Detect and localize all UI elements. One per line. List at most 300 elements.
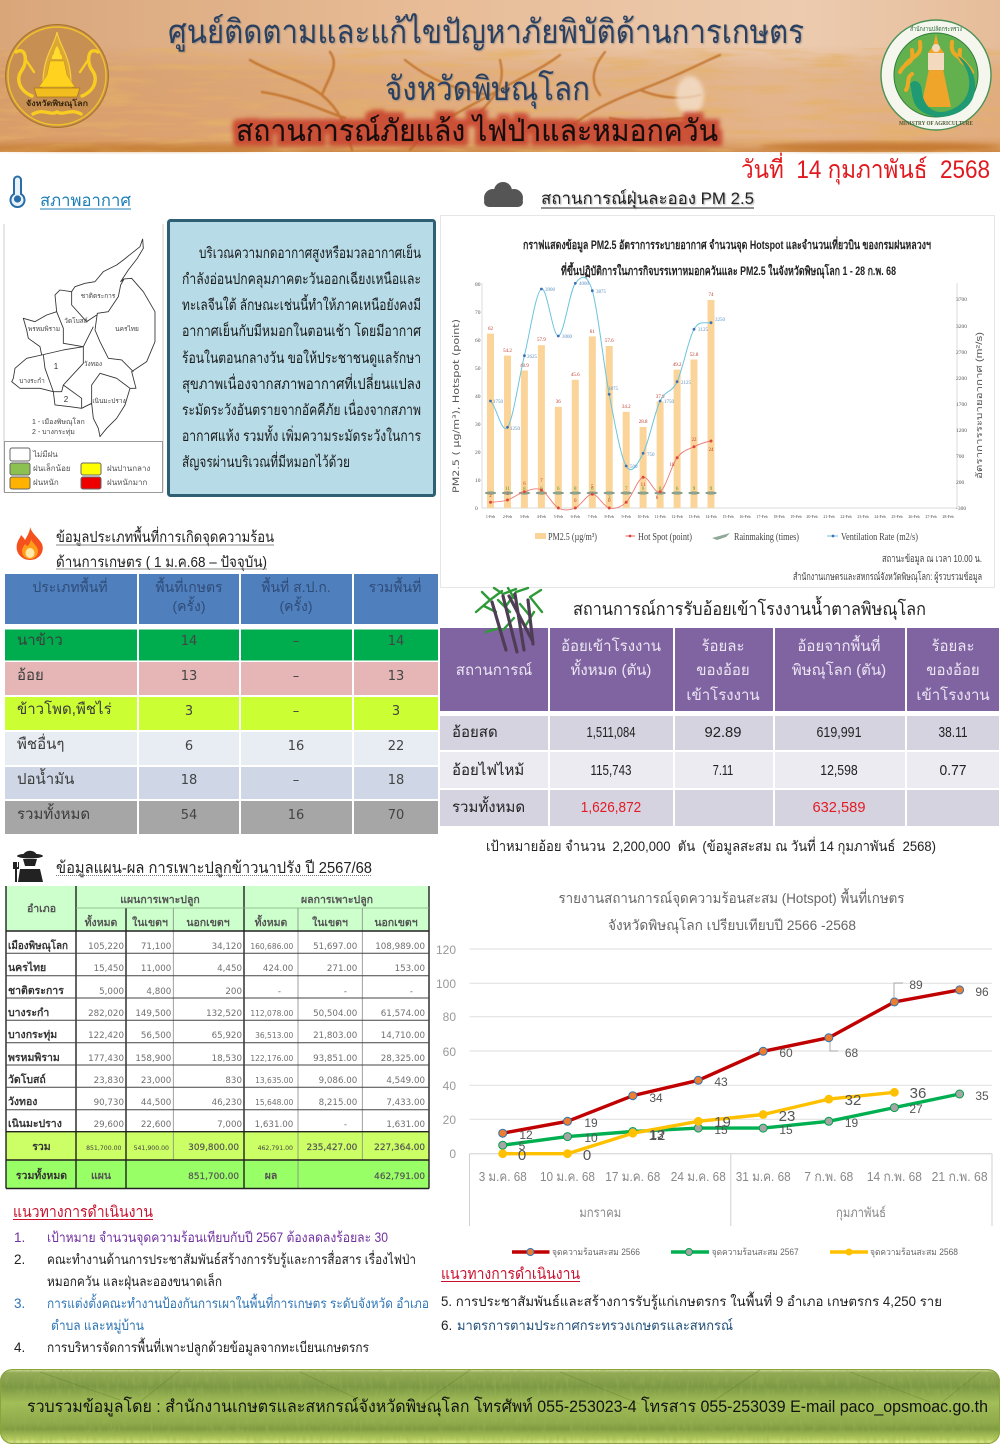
row: fresh cane: 1,511,084 (586, 724, 636, 741)
table headers: ในเขตฯ (312, 915, 348, 929)
rainmaking value labels: 8 (574, 487, 577, 492)
row: Wat Bot: 9,086.00 (319, 1076, 357, 1086)
row: Bang Krathum: 14,710.00 (381, 1031, 425, 1041)
row: Chat Trakan: 4,800 (146, 987, 171, 997)
PM2.5 value labels: 62 (488, 327, 494, 332)
data labels 2566 (519, 978, 989, 1142)
row: Phrom Phiram: 158,900 (135, 1054, 171, 1064)
title line 1: ศูนย์ติดตามและแก้ไขปัญหาภัยพิบัติด้านการเกษตร (168, 13, 804, 52)
ventilation markers and labels: 1875 (608, 387, 618, 392)
data labels 2568 (518, 1085, 926, 1164)
data labels 2568: 12 (649, 1127, 665, 1144)
row: Bang Rakam: บางระกำ (8, 1007, 49, 1019)
data labels 2567: 27 (909, 1102, 923, 1116)
weather map of Phitsanulok: วัดโบสถ์ (64, 317, 88, 325)
table header: พื้นที่เกษตร (155, 577, 223, 595)
table headers: ทั้งหมด (255, 914, 288, 929)
row: burnt cane: 12,598 (820, 762, 858, 779)
hot spot line (490, 441, 711, 510)
row: subtotal: รวม (32, 1141, 51, 1153)
heading: hotspot area types: ข้อมูลประเภทพื้นที่การเกิดจุดความร้อน (56, 526, 274, 547)
weather map of Phitsanulok: นครไทย (115, 325, 139, 333)
row: total: 16 (288, 808, 304, 823)
date axis labels: 6-Feb (571, 514, 580, 519)
header background: dry landscape (0, 0, 1000, 152)
item 2: หมอกควัน และฝุ่นละอองขนาดเล็ก (47, 1272, 222, 1290)
row: grand total: 851,700.00 (188, 1172, 239, 1182)
data status note (793, 553, 982, 583)
item 2: 2. (14, 1252, 25, 1267)
row: Mueang Phitsanulok: เมืองพิษณุโลก (8, 939, 68, 953)
table header: อ้อยเข้าโรงงาน (561, 637, 661, 655)
ventilation markers and labels: 3250 (715, 318, 726, 323)
rainmaking value labels: 11 (505, 487, 510, 492)
row: burnt cane: 115,743 (590, 762, 632, 779)
row: Bang Rakam: 61,574.00 (381, 1009, 425, 1019)
left axis labels: 40 (475, 394, 481, 400)
table: sugarcane (440, 628, 999, 826)
item 2: คณะทำงานด้านการประชาสัมพันธ์สร้างการรับรู้และการสื่อสาร เรื่องไฟป่า (47, 1250, 416, 1268)
row: Noen Maprang: 7,000 (217, 1120, 242, 1130)
table header: (ครั้ง) (172, 596, 206, 614)
chart legend: จุดความร้อนสะสม 2567 (712, 1247, 799, 1258)
hot spot markers and labels: 3 (506, 492, 509, 497)
rainmaking value labels: 6 (591, 487, 594, 492)
chart legend: จุดความร้อนสะสม 2566 (552, 1247, 640, 1258)
data labels 2566: 12 (519, 1128, 533, 1142)
date axis labels: 12-Feb (671, 514, 683, 519)
left axis labels: 70 (475, 310, 481, 316)
date axis labels: 5-Feb (554, 514, 563, 519)
hot spot markers and labels: 18 (670, 463, 675, 468)
item 4: 4. (14, 1340, 25, 1355)
date axis labels (486, 514, 954, 519)
row: Wat Bot: 13,635.00 (255, 1076, 294, 1085)
rainmaking value labels: 3 (608, 496, 611, 501)
item 5: 5. การประชาสัมพันธ์และสร้างการรับรู้แก่เกษตรกร ในพื้นที่ 9 อำเภอ เกษตรกร 4,250 ราย (441, 1291, 942, 1310)
item 6: 6. (441, 1318, 452, 1333)
ventilation markers and labels: 4000 (579, 282, 590, 287)
left axis labels (475, 282, 481, 512)
right axis labels: 1200 (956, 428, 967, 434)
row: total (5, 801, 438, 834)
right axis labels: 1700 (956, 402, 967, 408)
chart legend: Rainmaking (times) (734, 531, 799, 543)
row: Chat Trakan: ชาติตระการ (8, 985, 64, 997)
data labels 2567: 15 (714, 1123, 728, 1137)
table headers: อำเภอ (27, 903, 56, 915)
y axis labels: 80 (443, 1010, 456, 1024)
row: Noen Maprang: - (344, 1120, 347, 1130)
row: Nakhon Thai: 11,000 (141, 964, 171, 974)
weather map of Phitsanulok: บางระกำ (19, 377, 45, 385)
panel: weather (4, 176, 434, 496)
district outlines (12, 239, 155, 437)
row: other crops: พืชอื่นๆ (17, 733, 64, 753)
chart title (558, 888, 905, 934)
logo: Phitsanulok province seal: จังหวัดพิษณุโลก (26, 98, 88, 109)
row: Wat Bot (8, 1073, 425, 1086)
hot spot markers and labels: 11 (641, 483, 646, 488)
heading: guidelines left: แนวทางการดำเนินงาน (13, 1204, 153, 1221)
row: total (440, 790, 999, 826)
table header (440, 628, 999, 711)
panel: rice planting (6, 851, 429, 1188)
map legend: ฝนหนักมาก (107, 478, 148, 487)
row: subtotal (32, 1141, 425, 1153)
panel: cumulative hotspot line chart (436, 888, 992, 1258)
row: Chat Trakan: - (278, 987, 281, 997)
panel: guidelines left (13, 1204, 429, 1356)
date axis labels: 21-Feb (823, 514, 835, 519)
map legend (4, 442, 162, 492)
left axis labels: 60 (475, 338, 481, 344)
chart legend (512, 1247, 958, 1258)
row: Chat Trakan: 5,000 (99, 987, 124, 997)
row: Chat Trakan (8, 985, 413, 997)
row: fresh cane: 619,991 (816, 724, 862, 741)
ventilation markers and labels: 3125 (698, 328, 708, 333)
row: other crops: 16 (288, 739, 304, 754)
ventilation markers and labels: 750 (647, 453, 655, 458)
PM2.5 bars (487, 300, 714, 508)
footer banner (0, 1369, 1000, 1444)
left axis labels: 10 (475, 478, 481, 484)
row: Mueang Phitsanulok: 34,120 (212, 942, 242, 952)
PM2.5 value labels (488, 293, 714, 425)
data labels 2568: 0 (583, 1147, 591, 1164)
panel: guidelines right (441, 1266, 942, 1333)
row: grand total: ผล (265, 1170, 277, 1182)
row: burnt cane (440, 752, 999, 788)
left axis labels: 0 (475, 506, 478, 512)
row: total: 1,626,872 (581, 799, 641, 816)
PM2.5 value labels: 57.9 (537, 338, 546, 343)
date axis labels: 18-Feb (773, 514, 785, 519)
rainmaking value labels: 8 (523, 487, 526, 492)
rainmaking value labels: 6 (540, 487, 543, 492)
hot spot markers and labels (489, 438, 714, 510)
row: Noen Maprang: 1,631.00 (255, 1120, 293, 1130)
left axis labels: 30 (475, 422, 481, 428)
table: hotspot area types (5, 574, 438, 834)
chart legend: จุดความร้อนสะสม 2568 (870, 1247, 958, 1258)
row: other crops (5, 732, 438, 765)
item 1: 1. (14, 1230, 25, 1245)
row: other crops: 22 (388, 739, 404, 754)
row: Bang Krathum: 56,500 (141, 1031, 171, 1041)
panel: PM2.5 (440, 182, 994, 588)
date axis labels: 4-Feb (537, 514, 546, 519)
weather map of Phitsanulok: วังทอง (84, 360, 102, 368)
chart legend: Hot Spot (point) (638, 531, 692, 543)
date axis labels: 9-Feb (622, 514, 631, 519)
row: Wat Bot: 4,549.00 (386, 1076, 425, 1086)
row: Chat Trakan: 200 (225, 987, 242, 997)
weather description box: สุขภาพเนื่องจากสภาพอากาศที่เปลี่ยนแปลง (182, 373, 421, 394)
title line 2: จังหวัดพิษณุโลก (385, 70, 590, 109)
PM2.5 value labels: 61 (590, 330, 595, 335)
row: subtotal: 541,900.00 (134, 1145, 169, 1152)
table headers: ในเขตฯ (132, 915, 168, 929)
table header: ทั้งหมด (ตัน) (571, 659, 651, 679)
rainmaking value labels: 9 (693, 487, 696, 492)
row: rice field: 14 (181, 634, 197, 649)
heading: rice planting: ข้อมูลแผน-ผล การเพาะปลูกข้าวนาปรัง ปี 2567/68 (56, 859, 372, 878)
data labels 2567: 19 (845, 1116, 858, 1130)
data labels 2566: 19 (584, 1116, 598, 1130)
row: corn and field crops (5, 697, 438, 730)
chart title: จังหวัดพิษณุโลก เปรียบเทียบปี 2566 -2568 (608, 917, 856, 934)
right axis labels: 200 (956, 480, 964, 486)
chart legend: Ventilation Rate (m2/s) (841, 531, 918, 543)
title line 3 with red glow: สถานการณ์ภัยแล้ง ไฟป่าและหมอกควัน (236, 113, 718, 148)
map legend: ฝนหนัก (33, 478, 59, 487)
row: subtotal: 462,791.00 (258, 1145, 293, 1152)
item 3: ตำบล และหมู่บ้าน (51, 1318, 144, 1334)
date axis labels: 2-Feb (503, 514, 512, 519)
table header: เข้าโรงงาน (916, 686, 990, 704)
footer background: rice field (0, 1369, 1000, 1444)
item 3: 3. (14, 1296, 25, 1311)
item 6: มาตรการตามประกาศกระทรวงเกษตรและสหกรณ์ (457, 1317, 733, 1333)
rainmaking value labels (505, 487, 713, 501)
PM2.5 value labels: 45.6 (571, 373, 580, 378)
chart legend: PM2.5 (µg/m³) (548, 531, 597, 543)
row: Mueang Phitsanulok: 160,686.00 (250, 942, 294, 951)
date axis labels: 27-Feb (925, 514, 937, 519)
PM2.5 value labels: 57.6 (605, 339, 614, 344)
ventilation markers and labels: 1250 (510, 427, 520, 432)
data labels 2566: 60 (779, 1046, 793, 1060)
ventilation markers and labels: 500 (630, 465, 638, 470)
row: total: 54 (181, 808, 197, 823)
row: Bang Rakam: 282,020 (88, 1009, 124, 1019)
y axis labels: 20 (443, 1113, 456, 1127)
icon: fire (17, 527, 43, 560)
row: sugarcane: อ้อย (17, 667, 44, 684)
ventilation markers and labels: 3000 (562, 335, 572, 340)
icon: cloud (484, 182, 523, 207)
table header: รวมพื้นที่ (369, 577, 421, 595)
row: Wat Bot: 23,000 (141, 1076, 171, 1086)
heading: weather: สภาพอากาศ (40, 191, 131, 210)
date axis labels: 22-Feb (840, 514, 852, 519)
PM2.5 value labels: 37.9 (656, 395, 665, 400)
row: Wang Thong: 44,500 (141, 1098, 171, 1108)
row: Bang Krathum: 36,513.00 (255, 1031, 294, 1040)
category labels: 14 ก.พ. 68 (867, 1169, 922, 1184)
row: Nakhon Thai: 15,450 (94, 964, 124, 974)
row: Wang Thong: วังทอง (8, 1096, 37, 1108)
row: Mueang Phitsanulok: 105,220 (88, 942, 124, 952)
logo: Ministry of Agriculture and Cooperatives: MINISTRY OF AGRICULTURE (899, 120, 973, 127)
sugarcane target note: เป้าหมายอ้อย จำนวน 2,200,000 ตัน (ข้อมูลสะสม ณ วันที่ 14 กุมภาพันธ์ 2568) (486, 837, 936, 855)
heading: sugarcane: สถานการณ์การรับอ้อยเข้าโรงงานน้ำตาลพิษณุโลก (573, 596, 926, 620)
hot spot markers and labels: 2 (489, 494, 492, 499)
row: corn and field crops: – (293, 704, 299, 719)
row: Bang Rakam: 132,520 (206, 1009, 242, 1019)
logo: Phitsanulok province seal (6, 24, 108, 128)
data labels 2567: 13 (650, 1128, 664, 1142)
rainmaking value labels: 6 (642, 487, 645, 492)
row: Wang Thong (8, 1096, 425, 1108)
heading: guidelines right: แนวทางการดำเนินงาน (441, 1266, 580, 1283)
row: grand total: 462,791.00 (374, 1172, 425, 1182)
date axis labels: 25-Feb (891, 514, 903, 519)
date axis labels: 8-Feb (605, 514, 614, 519)
table header: เข้าโรงงาน (686, 686, 760, 704)
right axis labels: 2200 (956, 376, 967, 382)
row: oil palm: – (293, 773, 299, 788)
row: burnt cane: อ้อยไฟไหม้ (452, 761, 524, 779)
date axis labels: 13-Feb (688, 514, 700, 519)
category labels: 21 ก.พ. 68 (932, 1169, 988, 1184)
row: corn and field crops: ข้าวโพด,พืชไร่ (17, 700, 112, 718)
chart legend (535, 531, 918, 543)
weather map of Phitsanulok: ชาติตระการ (81, 292, 116, 300)
table headers (27, 894, 418, 929)
row: Noen Maprang: 22,600 (141, 1120, 171, 1130)
row: subtotal: 851,700.00 (86, 1145, 122, 1152)
rainmaking value labels: 6 (557, 487, 560, 492)
row: Wang Thong: 90,730 (94, 1098, 124, 1108)
date axis labels: 17-Feb (756, 514, 768, 519)
weather map of Phitsanulok: พรหมพิราม (28, 325, 60, 333)
row: Bang Krathum (8, 1029, 425, 1042)
rainmaking value labels: 9 (710, 487, 713, 492)
item 1: เป้าหมาย จำนวนจุดความร้อนเทียบกับปี 2567 ต้องลดลงร้อยละ 30 (47, 1230, 388, 1246)
row: rice field: นาข้าว (17, 632, 63, 649)
ventilation markers and labels: 1750 (493, 400, 504, 405)
table headers: ทั้งหมด (85, 914, 118, 929)
hot spot markers and labels: 22 (692, 438, 697, 443)
row: other crops: 6 (185, 739, 193, 754)
heading: hotspot area types (56, 526, 274, 572)
PM2.5 value labels: 49.2 (673, 363, 682, 368)
item 3: การแต่งตั้งคณะทำงานป้องกันการเผาในพื้นที่การเกษตร ระดับจังหวัด อำเภอ (47, 1293, 429, 1311)
category labels: 3 ม.ค. 68 (479, 1169, 527, 1184)
table headers: แผนการเพาะปลูก (120, 894, 200, 907)
right axis title: อัตราการระบายอากาศ (m²/s) (974, 332, 984, 479)
heading: PM2.5 situation: สถานการณ์ฝุ่นละออง PM 2.5 (541, 189, 754, 209)
row: Bang Rakam: 149,500 (135, 1009, 171, 1019)
PM2.5 value labels: 54.2 (503, 349, 512, 354)
date axis labels: 23-Feb (857, 514, 869, 519)
logo: Ministry of Agriculture and Cooperatives (881, 20, 991, 130)
table headers: นอกเขตฯ (374, 917, 418, 929)
hot spot markers and labels: 5 (591, 485, 594, 490)
date axis labels: 1-Feb (486, 514, 495, 519)
date axis labels: 24-Feb (874, 514, 886, 519)
row: fresh cane: อ้อยสด (452, 724, 498, 741)
weather description box: กำลังอ่อนปกคลุมภาคตะวันออกเฉียงเหนือและ (182, 271, 421, 289)
ventilation markers and labels: 3875 (596, 290, 606, 295)
row: Noen Maprang: 29,600 (94, 1120, 124, 1130)
row: subtotal: 227,364.00 (374, 1143, 425, 1153)
row: Chat Trakan: - (410, 987, 413, 997)
row: Nakhon Thai (8, 961, 425, 974)
weather map of Phitsanulok: 1 - เมืองพิษณุโลก (32, 417, 85, 426)
date axis labels: 7-Feb (588, 514, 597, 519)
weather description box: อากาศแห้ง รวมทั้ง เพิ่มความระมัดระวังในการ (182, 425, 421, 445)
row: Phrom Phiram: พรหมพิราม (8, 1052, 60, 1064)
table headers: นอกเขตฯ (186, 917, 230, 929)
row: Noen Maprang: เนินมะปราง (8, 1118, 62, 1130)
row: fresh cane: 38.11 (938, 724, 968, 741)
row: Mueang Phitsanulok (8, 939, 425, 953)
right axis labels: 3200 (956, 324, 967, 330)
date axis labels: 28-Feb (942, 514, 954, 519)
date axis labels: 10-Feb (637, 514, 649, 519)
y axis labels: 100 (436, 977, 456, 991)
y axis labels: 60 (443, 1045, 456, 1059)
hot spot markers and labels: 7 (540, 479, 543, 484)
row: Mueang Phitsanulok: 51,697.00 (313, 942, 357, 952)
PM2.5 value labels: 34.2 (622, 405, 631, 410)
category labels: 7 ก.พ. 68 (804, 1169, 853, 1184)
chart frame (440, 216, 994, 588)
weather description box: ระมัดระวังอันตรายจากอัคคีภัย เนื่องจากสภาพ (182, 399, 421, 419)
PM2.5 value labels: 48.9 (520, 364, 529, 369)
row: Phrom Phiram: 28,325.00 (381, 1054, 425, 1064)
weather description box: ทะเลจีนใต้ ลักษณะเช่นนี้ทำให้ภาคเหนือยังคงมี (182, 294, 421, 314)
row: oil palm: 18 (181, 773, 197, 788)
data labels 2567: 10 (584, 1131, 598, 1145)
weather description box: อากาศเย็นกับมีหมอกในตอนเช้า โดยมีอากาศ (182, 321, 421, 340)
table header: พิษณุโลก (ตัน) (792, 661, 886, 680)
table fills (6, 886, 429, 1188)
table header: ประเภทพื้นที่ (32, 577, 108, 595)
row: grand total: รวมทั้งหมด (16, 1167, 67, 1182)
weather map of Phitsanulok: 2 - บางกระทุ่ม (32, 429, 75, 436)
row: total: รวมทั้งหมด (452, 796, 525, 816)
hot spot markers and labels: 6 (523, 482, 526, 487)
icon: sugarcane (476, 588, 542, 652)
row: Wat Bot: วัดโบสถ์ (8, 1073, 46, 1086)
row: Bang Krathum: 21,803.00 (313, 1031, 357, 1041)
row: grand total (16, 1167, 425, 1182)
hot spot markers and labels: 0 (608, 499, 611, 504)
table header: ร้อยละ (701, 638, 745, 655)
data labels 2567 (519, 1089, 989, 1153)
right axis labels: 700 (956, 454, 964, 460)
data labels 2568: 23 (779, 1108, 795, 1125)
date axis labels: 20-Feb (806, 514, 818, 519)
data labels 2567: 15 (779, 1123, 793, 1137)
row: sugarcane: 13 (388, 669, 404, 684)
left axis labels: 80 (475, 282, 481, 288)
row: oil palm (5, 767, 438, 799)
chart title (523, 236, 931, 279)
series 2566 (499, 983, 964, 1137)
map legend: ไม่มีฝน (32, 450, 58, 459)
date axis labels: 19-Feb (790, 514, 802, 519)
category labels: 24 ม.ค. 68 (671, 1169, 726, 1184)
row: Nakhon Thai: 424.00 (263, 964, 293, 974)
ventilation markers and labels: 1750 (664, 400, 674, 405)
ventilation markers and labels: 2125 (681, 381, 692, 386)
data labels 2566: 96 (975, 985, 989, 999)
y axis labels: 40 (443, 1079, 456, 1093)
row: Phrom Phiram: 122,176.00 (250, 1054, 294, 1063)
logo: Ministry of Agriculture and Cooperatives: สำนักงานปลัดกระทรวง (910, 25, 962, 33)
table header: (ครั้ง) (279, 596, 313, 614)
row: fresh cane: 92.89 (704, 724, 742, 741)
row: Wang Thong: 15,648.00 (255, 1098, 294, 1107)
series 2567 (499, 1090, 964, 1149)
map legend: ฝนเล็กน้อย (33, 463, 71, 473)
